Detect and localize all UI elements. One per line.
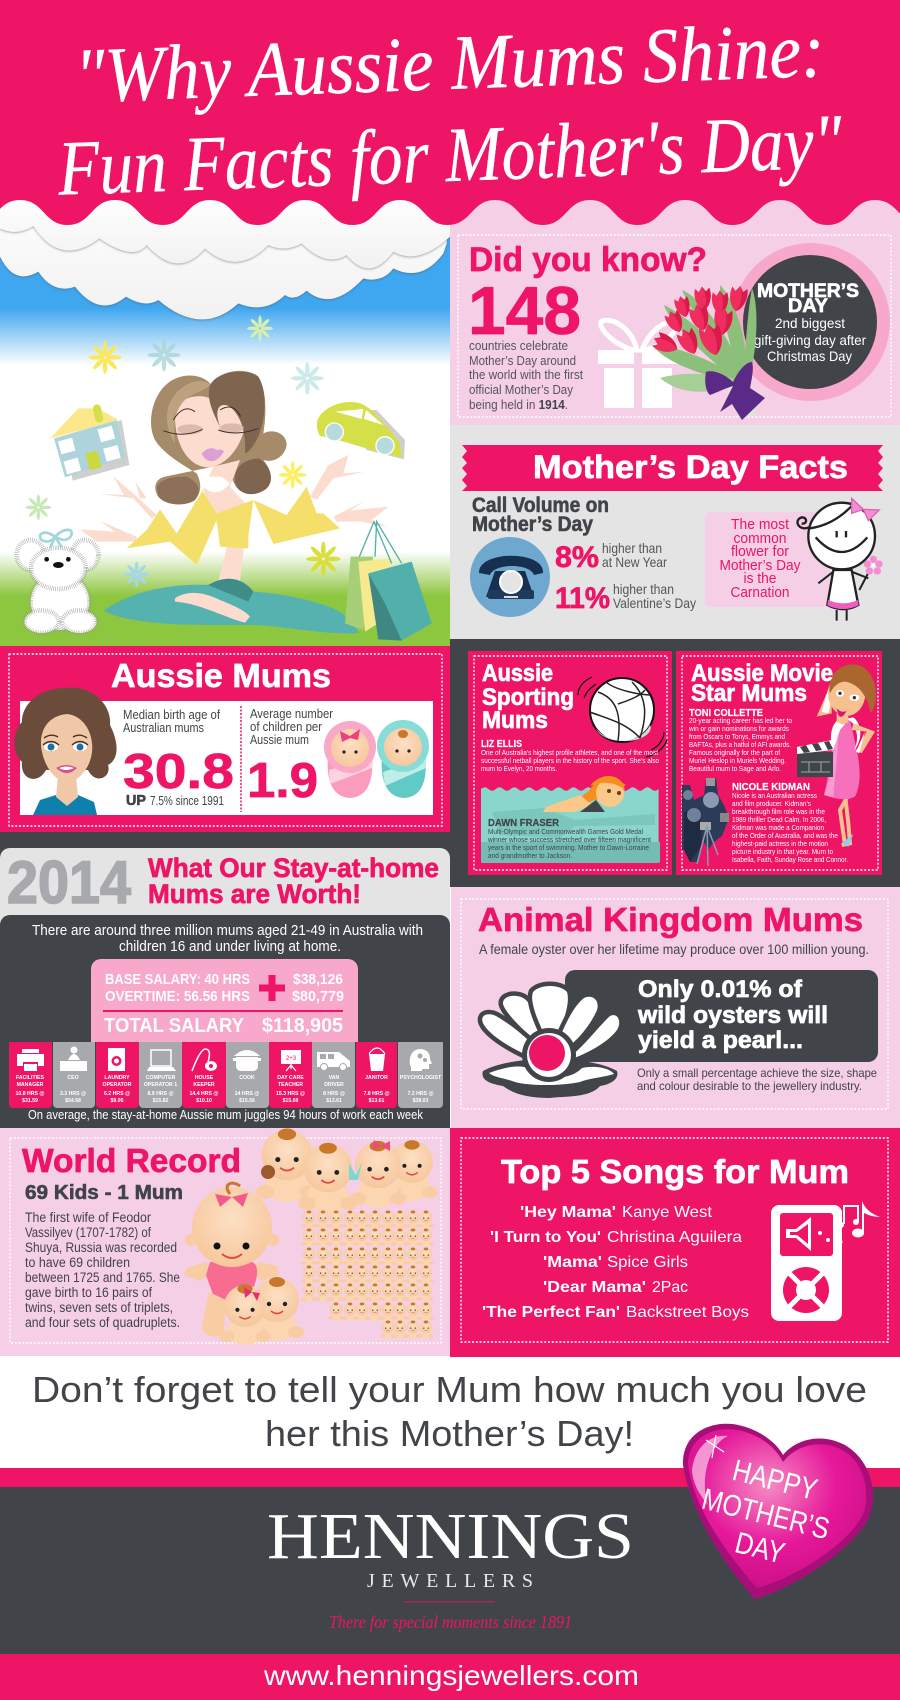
tile: computer operator: 8.9 HRS @ (147, 1091, 174, 1097)
salary box (91, 959, 358, 1042)
body text: twins, seven sets of triplets, (25, 1300, 173, 1315)
ribbon heading: Mother’s Day Facts (533, 449, 848, 485)
text: median birth age (123, 707, 234, 809)
illustration: woman portrait (14, 688, 117, 815)
salary box: $80,779 (292, 988, 344, 1005)
icon: oyster with pearl (482, 986, 619, 1098)
illustration: group of babies (256, 1129, 438, 1213)
tile: computer operator (139, 1042, 182, 1108)
circle: mother's day: DAY (788, 296, 828, 317)
salary box: BASE SALARY: 40 HRS (105, 971, 250, 988)
icon: telephone (470, 537, 550, 617)
tile: cook: COOK (239, 1075, 255, 1081)
salary box: $118,905 (262, 1015, 343, 1037)
tile: ceo: 3.3 HRS @ (60, 1091, 86, 1097)
body text: and four sets of quadruplets. (25, 1315, 180, 1330)
logo subtitle: JEWELLERS (367, 1570, 533, 1592)
text: liz ellis: One of Australia’s highest profile athletes, and one of the most (481, 748, 658, 757)
text: average children: Average number (250, 706, 334, 721)
woman trousers (103, 579, 359, 633)
text: dawn fraser: winner whose success stretched over fifteen magnificent (487, 835, 651, 844)
tile: janitor: $13.61 (369, 1098, 385, 1104)
call volume heading: Mother’s Day (472, 513, 593, 536)
tile: laundry operator (96, 1042, 139, 1108)
text: average children (247, 706, 334, 808)
circle: mother's day: gift-giving day after (754, 332, 866, 348)
text: toni collette: from Oscars to Tonys, Emmys and (689, 732, 785, 741)
song list: 2Pac (652, 1279, 688, 1296)
text: toni collette: Beautiful mum to Sage and Arlo. (689, 764, 781, 773)
title (53, 5, 844, 212)
icon: house (50, 404, 129, 481)
heading: Star Mums (691, 680, 807, 707)
year 2014: 2014 (7, 849, 132, 916)
text: nicole kidman: and film producer. Kidman’s (732, 799, 811, 808)
illustration: grid of tiny babies (301, 1211, 434, 1338)
callout: carnation: Carnation (730, 585, 790, 601)
text: median birth age: Australian mums (123, 720, 204, 735)
text: liz ellis: successful netball players in the history of the sport. She’s also (481, 756, 659, 765)
text: toni collette: BAFTAs, plus a hatful of AFI awards. (689, 740, 791, 749)
text: nicole kidman: highest-paid actress in the motion (732, 839, 828, 848)
stat: 8 percent: higher than (602, 540, 662, 556)
icon: tulip bouquet (650, 284, 765, 420)
callout: carnation: flower for (731, 544, 789, 560)
tile: computer operator: COMPUTER (146, 1075, 176, 1081)
body text (469, 338, 583, 412)
body text: Vassilyev (1707-1782) of (25, 1225, 151, 1240)
text: nicole kidman: NICOLE KIDMAN (732, 782, 810, 793)
callout: carnation: common (734, 531, 786, 547)
tile: house keeper: KEEPER (193, 1082, 215, 1088)
title: "Why Aussie Mums Shine: (73, 6, 826, 119)
icon: happy mother's day heart: HAPPY (729, 1454, 821, 1507)
text: toni collette (688, 708, 792, 773)
icon: dog (17, 530, 98, 633)
song list: Backstreet Boys (626, 1304, 749, 1321)
tile: van driver: VAN (329, 1075, 340, 1081)
tile: facilities manager: 10.8 HRS @ (16, 1091, 44, 1097)
tile: van driver: $13.61 (326, 1098, 342, 1104)
closing message: Don’t forget to tell your Mum how much you love (32, 1369, 867, 1410)
stat: 11 percent: higher than (613, 581, 674, 597)
tile: psychologist: PSYCHOLOGIST (400, 1075, 442, 1081)
tile: day care teacher (269, 1042, 312, 1108)
panel: hero illustration (0, 193, 450, 646)
text: median birth age: 7.5% since 1991 (150, 793, 224, 808)
stat: 11 percent: 11% (555, 582, 610, 615)
small text: and colour desirable to the jewellery industry. (637, 1079, 862, 1093)
header scallop band (0, 0, 900, 225)
body text (25, 1210, 180, 1330)
icon: music player (771, 1201, 880, 1321)
body text: the world with the first (469, 367, 583, 382)
panel: mother's day facts (450, 425, 900, 639)
tile: day care teacher: $15.08 (283, 1098, 299, 1104)
ribbon heading (462, 445, 883, 491)
tile: house keeper (182, 1042, 226, 1108)
tile: janitor (356, 1042, 397, 1108)
song list: 'Mama' (543, 1254, 602, 1271)
song list: 'The Perfect Fan' (482, 1304, 620, 1321)
panel: aussie sporting mums (468, 651, 672, 875)
tile: computer operator: OPERATOR 1 (144, 1082, 177, 1088)
salary box: TOTAL SALARY (104, 1015, 245, 1037)
flowers (25, 315, 341, 587)
icon: clapperboard (797, 740, 833, 777)
closing message (32, 1369, 867, 1454)
text: dawn fraser: Multi-Olympic and Commonwealth Games Gold Medal (488, 827, 643, 836)
panel: animal kingdom mums (451, 887, 900, 1128)
text: dawn fraser: and grandmother to Jackson. (488, 851, 572, 860)
body text: gave birth to 16 pairs of (25, 1285, 152, 1300)
tile: facilities manager: FACILITIES (16, 1075, 45, 1081)
heading (482, 660, 574, 734)
body text: official Mother’s Day (469, 382, 573, 397)
call volume heading: Call Volume on (472, 494, 609, 517)
callout: carnation: is the (744, 571, 776, 587)
text: median birth age: Median birth age of (123, 707, 220, 722)
closing message: her this Mother’s Day! (265, 1413, 634, 1454)
heading: World Record (22, 1142, 241, 1179)
heading: did you know: Did you know? (469, 241, 707, 279)
woman hair (151, 371, 287, 504)
text: liz ellis: mum to Evelyn, 20 months. (481, 764, 557, 773)
text: toni collette: 20-year acting career has led her to (689, 716, 792, 725)
heading: Aussie Mums (111, 657, 331, 694)
panel: stay-at-home mums (0, 832, 450, 1128)
panel: world record (0, 1128, 450, 1356)
woman face (163, 372, 265, 467)
salary box: OVERTIME: 56.56 HRS (105, 988, 250, 1005)
heading (148, 853, 439, 909)
tile: house keeper: HOUSE (195, 1075, 214, 1081)
heading: Animal Kingdom Mums (478, 901, 863, 938)
text: dawn fraser: DAWN FRASER (488, 818, 560, 829)
tile: facilities manager (9, 1042, 52, 1108)
body text: between 1725 and 1765. She (25, 1270, 180, 1285)
song list (482, 1204, 749, 1321)
icon: stick girl (797, 498, 883, 621)
panel: did you know (450, 190, 900, 425)
text: toni collette: Famous originally for the part of (689, 748, 781, 757)
text: nicole kidman: Kidman was made a Companion (732, 823, 824, 832)
callout: carnation: Mother’s Day (720, 558, 801, 574)
small text: Only a small percentage achieve the size, shape (637, 1066, 877, 1080)
song list: Spice Girls (607, 1254, 688, 1271)
icon: swaddled babies (324, 720, 429, 798)
body text: Shuya, Russia was recorded (25, 1240, 177, 1255)
text: liz ellis: LIZ ELLIS (481, 739, 522, 750)
intro text: children 16 and under living at home. (119, 939, 341, 955)
heading: What Our Stay-at-home (148, 853, 439, 883)
woman neck and chest (203, 460, 248, 582)
text: nicole kidman: Isabella, Faith, Sunday Rose and Connor. (732, 855, 848, 864)
tile: laundry operator: OPERATOR (103, 1082, 132, 1088)
callout: carnation (705, 512, 830, 607)
song list: Kanye West (622, 1204, 713, 1221)
icon: happy mother's day heart (683, 1424, 873, 1599)
text: average children: of children per (250, 719, 323, 734)
heading: Mums (482, 707, 548, 734)
text: nicole kidman (732, 782, 848, 864)
tile: van driver: 8 HRS @ (323, 1091, 345, 1097)
text: liz ellis (481, 739, 659, 773)
song list: 'Hey Mama' (520, 1204, 616, 1221)
clouds (0, 193, 450, 319)
tile: ceo: $54.58 (65, 1098, 81, 1104)
tile: janitor: 7.8 HRS @ (363, 1091, 390, 1097)
footnote: On average, the stay-at-home Aussie mum juggles 94 hours of work each week (28, 1108, 424, 1122)
text: toni collette: win or gain nominations for awards (688, 724, 789, 733)
stat: 8 percent: 8% (555, 541, 599, 574)
text: average children: 1.9 (247, 754, 318, 808)
subheading: 69 Kids - 1 Mum (25, 1182, 183, 1204)
text: nicole kidman: Nicole is an Australian actress (732, 791, 817, 800)
callout bar: Only 0.01% of (638, 976, 803, 1003)
job tiles (9, 1042, 443, 1108)
woman shirt (127, 487, 340, 565)
stat: 8 percent: at New Year (602, 554, 667, 570)
illustration: movie star (817, 664, 876, 847)
panel: aussie movie star mums (676, 651, 882, 875)
tile: psychologist: 7.3 HRS @ (407, 1091, 434, 1097)
tile: psychologist (398, 1042, 443, 1108)
tagline: There for special moments since 1891 (329, 1612, 572, 1632)
callout bar: wild oysters will (637, 1002, 828, 1029)
body text: countries celebrate (469, 338, 568, 353)
song list: Christina Aguilera (607, 1229, 742, 1246)
text: median birth age: UP (126, 793, 146, 809)
tile: day care teacher: 2+3 (286, 1056, 297, 1062)
logo wordmark: HENNINGS (267, 1500, 634, 1573)
text: toni collette: Muriel Heslop in Muriels Wedding. (689, 756, 786, 765)
body text: Mother’s Day around (469, 353, 576, 368)
illustration: twin babies (219, 1277, 304, 1345)
callout bar (565, 970, 878, 1062)
call volume heading (472, 494, 609, 536)
heading: Aussie (482, 660, 553, 687)
heading: Mums are Worth! (148, 879, 361, 909)
icon: happy mother's day heart: DAY (732, 1526, 788, 1571)
tile: ceo: CEO (67, 1075, 79, 1081)
text: nicole kidman: picture industry in that year. Mum to (732, 847, 833, 856)
stat: 11 percent: Valentine’s Day (613, 595, 696, 611)
panel: top 5 songs (450, 1128, 900, 1357)
tile: laundry operator: $9.95 (111, 1098, 124, 1104)
body text: being held in 1914. (469, 397, 568, 412)
circle: mother's day: Christmas Day (767, 348, 852, 364)
illustration: paparazzi (682, 778, 729, 866)
pink band (0, 1468, 900, 1487)
tile: psychologist: $38.03 (413, 1098, 429, 1104)
tile: house keeper: $10.10 (196, 1098, 212, 1104)
tile: facilities manager: $31.59 (22, 1098, 38, 1104)
text: nicole kidman: breakthrough film role was in the (732, 807, 825, 816)
tile: van driver: DRIVER (324, 1082, 344, 1088)
intro text (32, 923, 423, 955)
heading: Top 5 Songs for Mum (501, 1153, 849, 1190)
heading (691, 660, 833, 707)
woman arms (80, 455, 388, 542)
pink footer with url: www.henningsjewellers.com (263, 1660, 639, 1691)
tile: day care teacher: DAY CARE (277, 1075, 304, 1081)
white card (20, 701, 433, 815)
circle: mother's day (732, 243, 890, 401)
big number 148: 148 (468, 273, 581, 349)
heading: Aussie Movie (691, 660, 833, 687)
illustration: water and swimmer (481, 776, 660, 863)
text: average children: Aussie mum (250, 732, 309, 747)
illustration: large baby in pink (184, 1183, 279, 1337)
icon: happy mother's day heart: MOTHER’S (699, 1483, 833, 1546)
icon: shopping bags (345, 522, 432, 641)
divider (240, 706, 242, 812)
text: toni collette: TONI COLLETTE (689, 708, 763, 719)
text: nicole kidman: of the Order of Australia, and was the (732, 831, 838, 840)
icon: netball (578, 677, 667, 757)
circle: mother's day: 2nd biggest (775, 315, 845, 331)
text: nicole kidman: 1989 thriller Dead Calm. In 2006, (732, 815, 826, 824)
song list: 'I Turn to You' (490, 1229, 601, 1246)
icon: gift (598, 320, 677, 408)
salary box: $38,126 (293, 971, 343, 988)
text: dawn fraser: years in the sport of swimming. Mother to Dawn-Lorraine (488, 843, 649, 852)
tile: cook (226, 1042, 269, 1108)
pink footer with url (0, 1654, 900, 1700)
small text (637, 1066, 877, 1093)
body text: to have 69 children (25, 1255, 130, 1270)
song list: 'Dear Mama' (543, 1279, 646, 1296)
tile: laundry operator: LAUNDRY (104, 1075, 130, 1081)
text: dawn fraser (487, 818, 651, 860)
tile: laundry operator: 6.2 HRS @ (104, 1091, 130, 1097)
stat: 8 percent (555, 540, 667, 574)
tile: facilities manager: MANAGER (17, 1082, 44, 1088)
heading: Sporting (482, 684, 574, 711)
icon: car (317, 402, 405, 459)
text: median birth age: 30.8 (123, 745, 234, 799)
tile: cook: $15.56 (239, 1098, 255, 1104)
panel: aussie mums (0, 646, 450, 832)
tile: janitor: JANITOR (365, 1075, 388, 1081)
panel: footer brand (0, 1487, 900, 1654)
body text: The first wife of Feodor (25, 1210, 151, 1225)
callout: carnation: The most (731, 517, 789, 533)
sentence: A female oyster over her lifetime may produce over 100 million young. (479, 942, 869, 957)
tile: day care teacher: TEACHER (278, 1082, 303, 1088)
tile: van driver (312, 1042, 355, 1108)
tile: ceo (53, 1042, 95, 1108)
circle: mother's day: MOTHER’S (757, 281, 859, 302)
tile: cook: 14 HRS @ (235, 1091, 259, 1097)
tile: computer operator: $15.82 (153, 1098, 169, 1104)
panel: dark background (450, 639, 900, 887)
tile: house keeper: 14.4 HRS @ (190, 1091, 218, 1097)
intro text: There are around three million mums aged 21-49 in Australia with (32, 923, 423, 939)
tile: day care teacher: 15.3 HRS @ (276, 1091, 305, 1097)
callout bar: yield a pearl... (638, 1027, 803, 1054)
grey header (0, 848, 450, 925)
stat: 11 percent (555, 581, 696, 615)
